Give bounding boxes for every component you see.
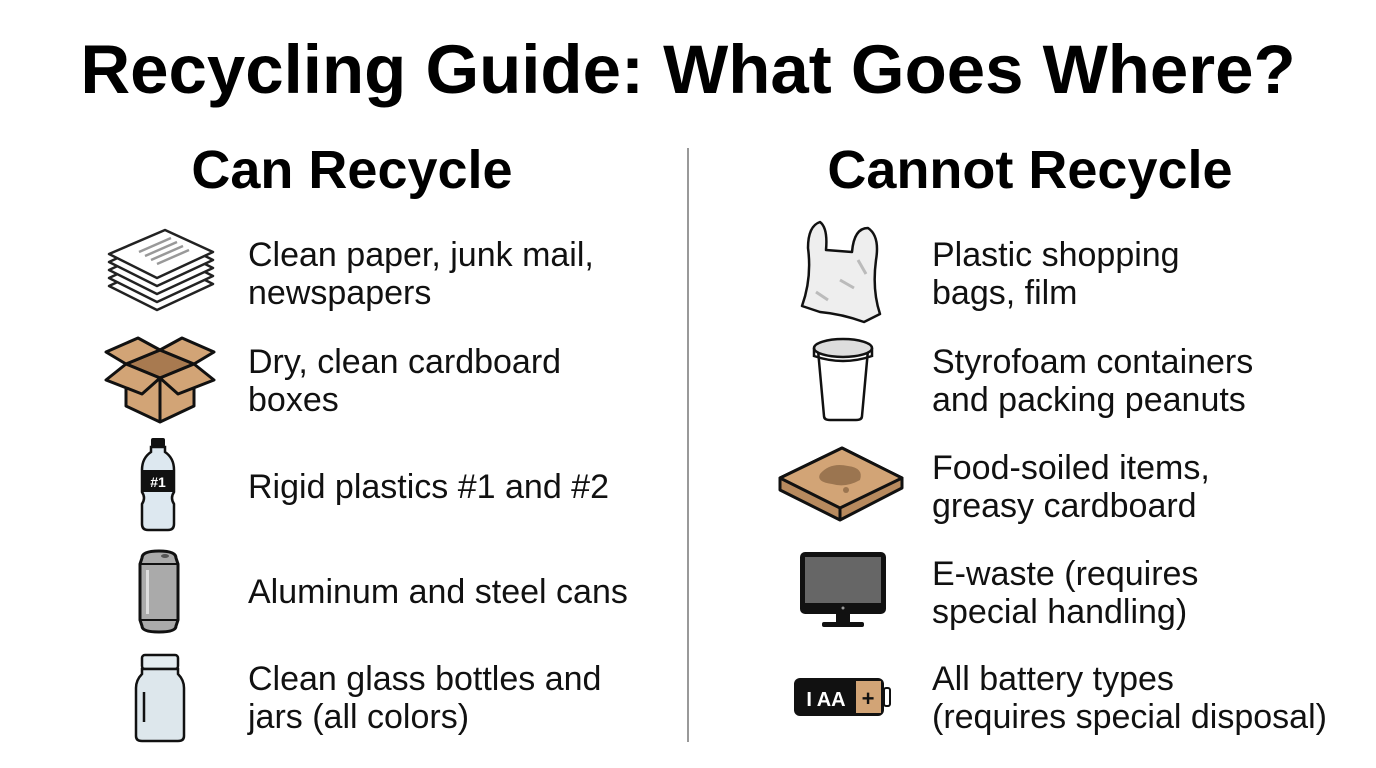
- text: glass: jars (all colors): [248, 698, 469, 736]
- text: food-soiled: Food-soiled items,: [932, 449, 1210, 487]
- icon: plastic bottle: [140, 438, 176, 532]
- heading: can recycle: Can Recycle: [191, 140, 513, 200]
- panel: cannot recycle: [778, 220, 1327, 736]
- text: e-waste: [932, 555, 1198, 631]
- text: cardboard: boxes: [248, 381, 339, 419]
- icon: battery: +: [862, 686, 874, 711]
- text: cans: Aluminum and steel cans: [248, 573, 628, 611]
- text: batteries: [932, 660, 1327, 736]
- text: cardboard: [248, 343, 561, 419]
- icon: can: [138, 550, 180, 634]
- text: e-waste: special handling): [932, 593, 1187, 631]
- text: batteries: (requires special disposal): [932, 698, 1327, 736]
- icon: paper stack: [108, 228, 214, 312]
- icon: plastic bag: [800, 220, 882, 324]
- text: paper: Clean paper, junk mail,: [248, 236, 594, 274]
- text: bags: Plastic shopping: [932, 236, 1180, 274]
- text: e-waste: E-waste (requires: [932, 555, 1198, 593]
- text: bags: [932, 236, 1180, 312]
- text: glass: [247, 660, 601, 736]
- text: batteries: All battery types: [932, 660, 1174, 698]
- text: styrofoam: Styrofoam containers: [932, 343, 1253, 381]
- heading: cannot recycle: Cannot Recycle: [827, 140, 1233, 200]
- icon: greasy pizza box: [778, 446, 904, 522]
- icon: glass jar: [134, 654, 186, 742]
- icon: battery: [794, 678, 891, 716]
- text: cardboard: Dry, clean cardboard: [248, 343, 561, 381]
- icon: foam cup: [812, 338, 874, 422]
- icon: monitor: [800, 552, 886, 627]
- text: plastics: Rigid plastics #1 and #2: [248, 468, 609, 506]
- panel: can recycle: [104, 228, 628, 742]
- icon: cardboard box: [104, 336, 216, 424]
- text: glass: Clean glass bottles and: [248, 660, 601, 698]
- text: food-soiled: [932, 449, 1210, 525]
- title: Recycling Guide: What Goes Where?: [80, 31, 1296, 108]
- text: paper: newspapers: [248, 274, 431, 312]
- text: paper: [248, 236, 594, 312]
- text: bags: bags, film: [932, 274, 1078, 312]
- icon: plastic bottle: #1: [150, 474, 166, 490]
- text: styrofoam: and packing peanuts: [932, 381, 1246, 419]
- text: food-soiled: greasy cardboard: [932, 487, 1197, 525]
- text: styrofoam: [932, 343, 1253, 419]
- icon: battery: I AA: [806, 689, 846, 711]
